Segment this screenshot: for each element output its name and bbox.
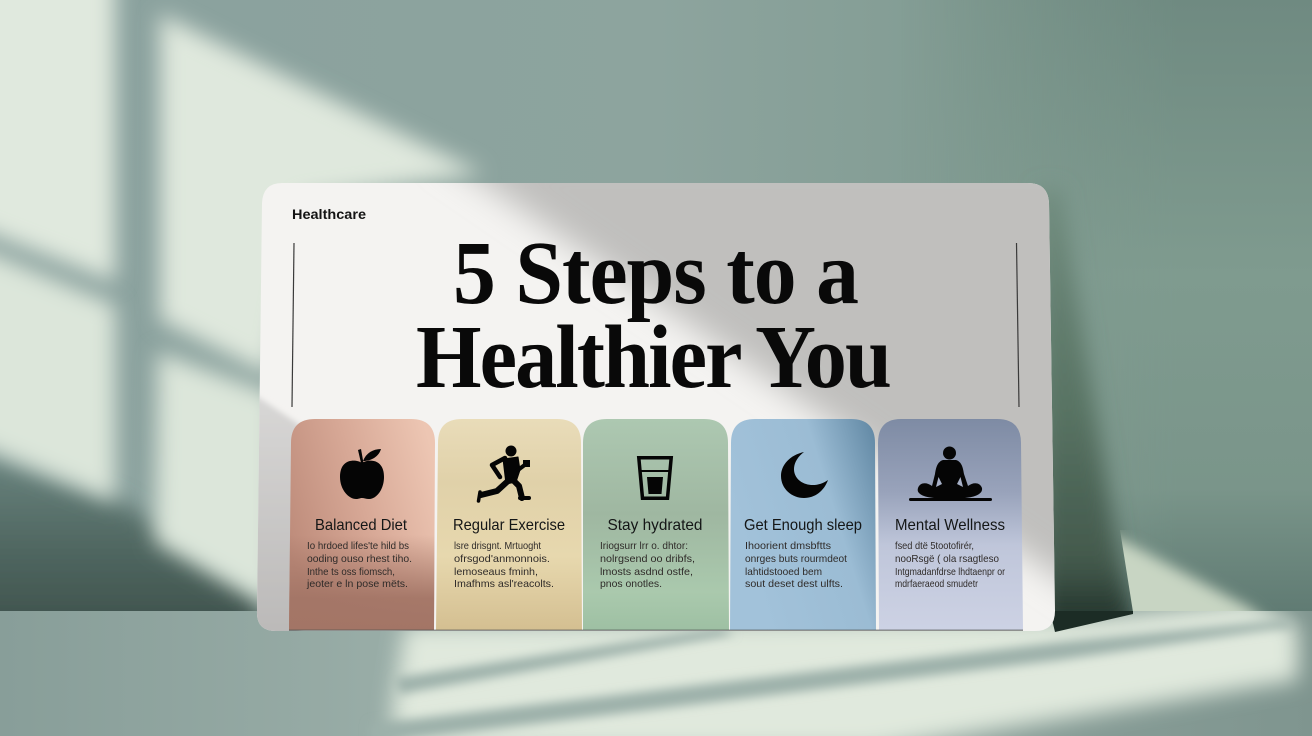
heading: Stay hydrated: [608, 517, 702, 534]
body text: lsre drisgnt. Mrtuoght: [454, 540, 541, 552]
body text: [600, 540, 695, 590]
card cast shadow on wall: [1048, 194, 1133, 611]
card bottom edge: [289, 630, 1023, 631]
heading: Regular Exercise: [453, 517, 565, 534]
title: Healthier You: [416, 308, 890, 407]
right rule: [1016, 243, 1019, 407]
body text: [306, 540, 412, 590]
body text: [745, 540, 847, 590]
tag: Healthcare: Healthcare: [292, 206, 366, 222]
floor light streaks: [370, 600, 1298, 736]
panel: Stay hydrated: [583, 419, 729, 630]
body text: Ihoorient dmsbftts: [745, 540, 831, 552]
body text: [454, 540, 554, 590]
wall shade right: [1030, 0, 1312, 611]
body text: nooRsgë ( ola rsagtleso: [895, 553, 999, 565]
left rule: [292, 243, 294, 407]
cast shadow on floor: [1050, 611, 1133, 632]
panel: Get Enough sleep: [730, 419, 876, 630]
panel: Balanced Diet: [289, 419, 435, 630]
title: 5 Steps to a: [453, 224, 858, 323]
heading: Get Enough sleep: [744, 517, 862, 534]
body text: Iriogsurr lrr o. dhtor:: [600, 540, 688, 552]
body text: lemoseaus fminh,: [454, 566, 538, 578]
icon: meditating figure: [909, 446, 992, 501]
body text: [895, 540, 1005, 590]
heading: Mental Wellness: [895, 517, 1005, 534]
icon: glass of water: [639, 458, 671, 498]
panel: Regular Exercise: [436, 419, 582, 630]
main card: [256, 183, 1055, 631]
panel: Mental Wellness: [878, 419, 1023, 630]
window light and shadow on wall: [0, 0, 483, 640]
body text: mdrfaeraeod smudetr: [895, 578, 978, 590]
body text: nolrgsend oo dribfs,: [600, 553, 695, 565]
title: [416, 224, 890, 407]
body text: Io hrdoed lifes'te hild bs: [307, 540, 409, 552]
floor: [0, 611, 1312, 736]
body text: Imafhms asl'reacolts.: [454, 578, 554, 590]
body text: ooding ouso rhest tiho.: [307, 553, 412, 565]
body text: sout deset dest ulfts.: [745, 578, 843, 590]
icon: runner: [478, 446, 530, 501]
body text: pnos onotles.: [600, 578, 662, 590]
body text: onrges buts rourmdeot: [745, 553, 847, 565]
body text: lahtidstooed bem: [745, 566, 822, 578]
body text: Intgmadanfdrse lhdtaenpr or: [895, 566, 1005, 578]
icon: crescent moon: [781, 452, 828, 498]
heading: Balanced Diet: [315, 517, 408, 534]
body text: lmosts asdnd ostfe,: [600, 566, 693, 578]
body text: Inthe ts oss fiomsch,: [307, 566, 395, 578]
body text: fsed dtë 5tootofirér,: [895, 540, 974, 552]
wall light wedge: [1120, 530, 1267, 611]
body text: jeoter e ln pose mëts.: [306, 578, 408, 590]
icon: apple: [340, 449, 384, 499]
body text: ofrsgod'anmonnois.: [454, 553, 550, 565]
